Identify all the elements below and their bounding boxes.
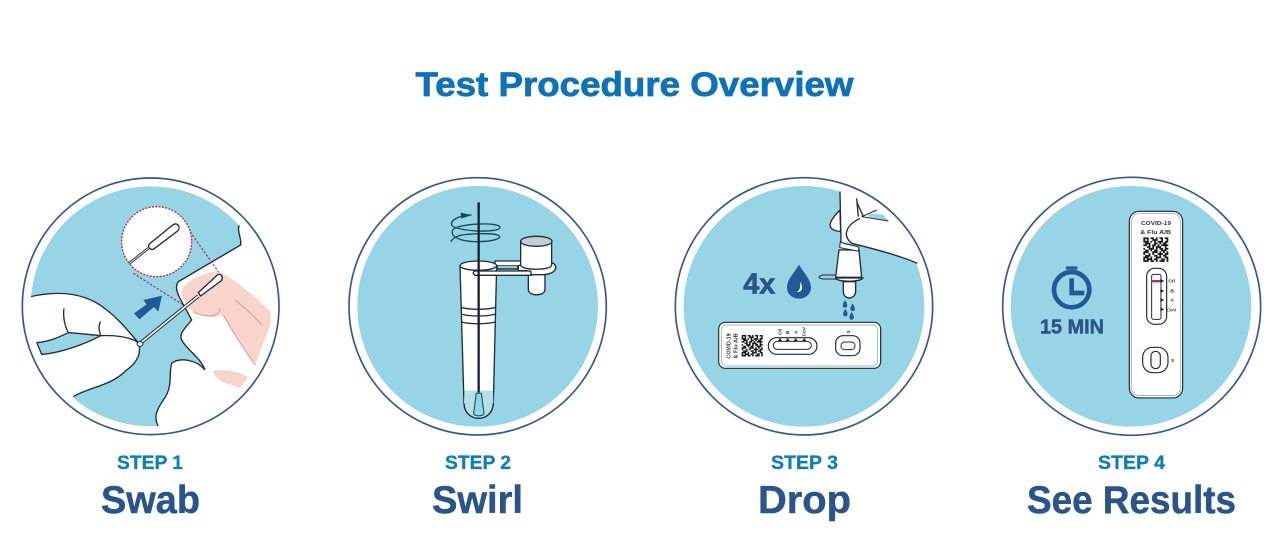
step name: Swirl xyxy=(432,479,523,522)
test cassette: A xyxy=(793,330,798,334)
test cassette xyxy=(719,322,881,368)
15 MIN label: 15 MIN xyxy=(1040,316,1104,338)
result cassette: CoV xyxy=(1166,307,1177,313)
title: Test Procedure Overview xyxy=(416,66,854,104)
test cassette: Ctl xyxy=(777,329,782,335)
infographic: test procedure overview xyxy=(22,70,1262,522)
icon: drop xyxy=(787,265,811,299)
swab stick xyxy=(475,202,482,393)
test cassette: & Flu A/B xyxy=(733,333,739,359)
panel: step 4 see results xyxy=(1003,177,1261,522)
result cassette: A xyxy=(1170,298,1174,304)
result cassette: COVID-19 xyxy=(1141,221,1171,227)
result cassette: S xyxy=(1171,358,1175,364)
test cassette: S xyxy=(846,330,851,333)
magnified swab inset xyxy=(122,207,192,277)
white hand area xyxy=(840,192,916,262)
step name: See Results xyxy=(1027,479,1236,522)
result cassette xyxy=(1129,211,1183,398)
panel: step 2 swirl xyxy=(349,178,606,522)
step label: STEP 3 xyxy=(771,452,838,474)
result cassette: & Flu A/B xyxy=(1140,230,1171,236)
nostril shading xyxy=(213,371,247,387)
panel: step 3 drop xyxy=(675,178,938,522)
step name: Drop xyxy=(758,479,851,522)
zoom guide lines xyxy=(133,232,218,305)
illustration: swab in tube xyxy=(349,178,606,435)
dropper tube xyxy=(819,192,888,298)
result cassette: Ctl xyxy=(1168,279,1176,285)
front finger xyxy=(846,218,917,263)
panel: step 1 swab xyxy=(20,178,283,522)
cap xyxy=(521,236,552,295)
cap tether xyxy=(495,261,522,269)
illustration: timer and result cassette xyxy=(1003,177,1261,435)
sample well xyxy=(1143,347,1168,373)
illustration: swabbing the nostril xyxy=(20,178,283,437)
step label: STEP 1 xyxy=(117,452,183,474)
test cassette: CoV xyxy=(802,326,807,336)
arrow xyxy=(134,296,162,319)
swirl arrow xyxy=(451,213,500,242)
back finger xyxy=(830,210,841,231)
step label: STEP 4 xyxy=(1098,452,1165,474)
result window xyxy=(1147,268,1167,324)
swab xyxy=(137,274,222,346)
icon: timer xyxy=(1054,268,1089,307)
result cassette: B xyxy=(1170,288,1174,294)
test cassette: COVID-19 xyxy=(727,333,733,359)
blue sliver between fingers xyxy=(868,214,889,221)
test cassette: B xyxy=(785,330,790,334)
step label: STEP 2 xyxy=(445,452,511,474)
tube xyxy=(460,261,531,418)
step name: Swab xyxy=(101,479,200,522)
nasal cavity xyxy=(182,271,271,365)
illustration: drops on cassette xyxy=(675,178,938,435)
falling droplets xyxy=(843,300,855,320)
4x label: 4x xyxy=(743,268,775,300)
